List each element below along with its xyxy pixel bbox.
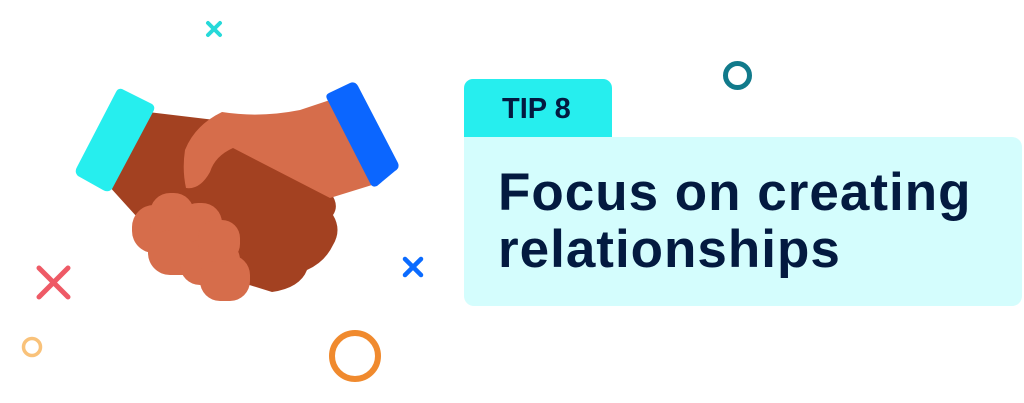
heading: relationships: [498, 220, 841, 279]
icon: big orange ring: [332, 333, 378, 379]
heading: [498, 163, 971, 279]
tab: TIP 8: [464, 79, 612, 137]
tab: TIP 8: TIP 8: [502, 93, 571, 125]
panel: title box: [464, 137, 1022, 306]
handshake: [76, 82, 399, 301]
icon: red x: [39, 268, 68, 297]
illustration: handshake and decorations: [22, 20, 424, 382]
icon: blue x: [405, 259, 421, 275]
icon: teal ring: [723, 61, 752, 90]
icon: cyan x: [208, 23, 220, 35]
icon: small orange ring: [24, 338, 40, 356]
heading: Focus on creating: [498, 163, 971, 222]
